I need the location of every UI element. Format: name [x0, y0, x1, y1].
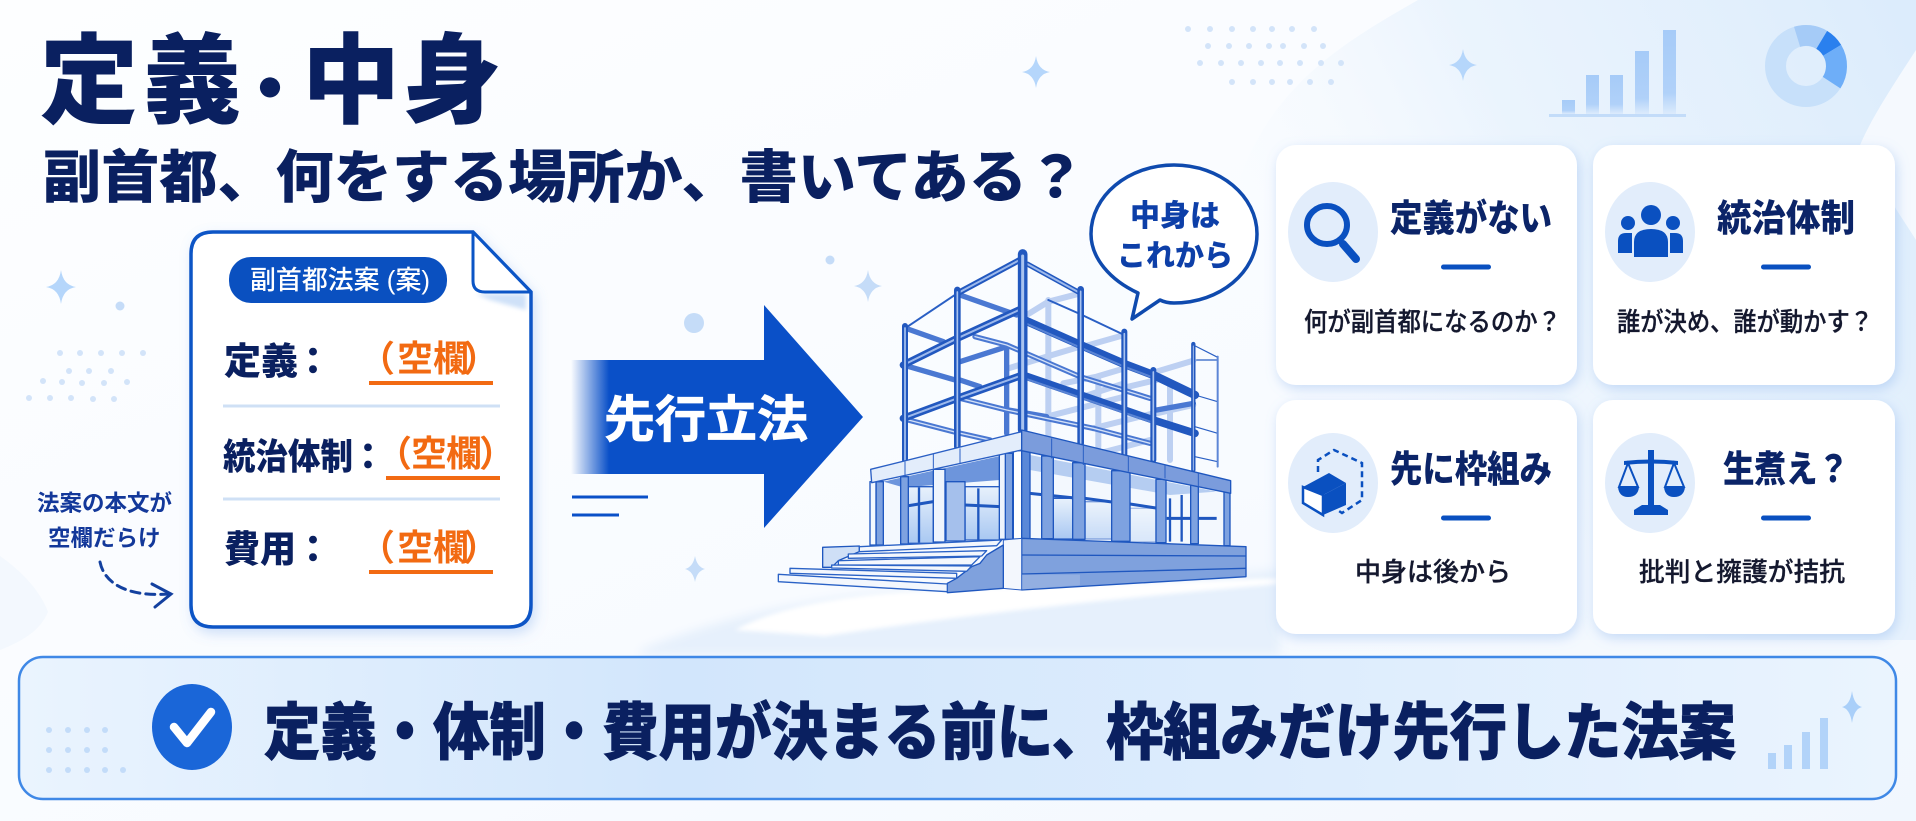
row: cost [224, 527, 499, 574]
banner text [264, 698, 1736, 768]
card text: 何が副首都になるのか？ [1304, 307, 1561, 337]
card heading: 統治体制 [1717, 198, 1855, 239]
icon: donut chart decoration [1764, 24, 1848, 108]
row: governance: （空欄） [376, 433, 515, 474]
building upper frame [903, 254, 1218, 470]
icon: magnifying glass [1288, 182, 1378, 282]
speech bubble [1091, 165, 1257, 319]
subtitle: 副首都、何をする場所か、書いてある？ [43, 146, 1085, 210]
document folded corner [473, 232, 531, 292]
row: definition: （空欄） [359, 338, 499, 379]
building podium and stairs [778, 430, 1246, 593]
speech bubble: 中身は [1130, 200, 1220, 233]
card text: 中身は後から [1355, 557, 1511, 587]
row: cost: （空欄） [359, 527, 499, 568]
arrow: 先行立法: 先行立法 [604, 392, 808, 448]
panel: half-baked [1593, 400, 1895, 634]
title: 定義・中身 [40, 26, 501, 136]
row: definition [224, 338, 499, 385]
row: cost: ： [294, 529, 332, 570]
icon: scales [1605, 433, 1695, 533]
icon: bar chart decoration [1549, 30, 1686, 117]
document tag [229, 257, 447, 303]
icon: cube [1288, 433, 1378, 533]
callout: blanks note: 法案の本文が [37, 490, 173, 516]
banner text: 枠組みだけ先行した法案 [1106, 699, 1736, 768]
arrow: 先行立法 [571, 305, 863, 528]
card heading: 定義がない [1390, 197, 1552, 239]
row: governance: 統治体制 [223, 436, 353, 477]
callout: blanks note: 空欄だらけ [48, 526, 161, 551]
illustration: steel frame building [778, 254, 1246, 593]
row: cost: 費用 [224, 529, 296, 570]
decoration: center stars and dots [684, 256, 882, 582]
row: governance [223, 433, 515, 480]
arrow: dashed pointer to document [100, 562, 171, 607]
card text: 批判と擁護が拮抗 [1639, 557, 1845, 587]
panel: draft bill document [191, 232, 531, 627]
row: governance: ： [350, 436, 386, 477]
panel: no definition [1276, 145, 1577, 385]
panel: governance [1593, 145, 1895, 385]
card heading: 先に枠組み [1390, 449, 1552, 490]
row: definition: 定義 [224, 341, 298, 382]
row: definition: ： [294, 341, 332, 382]
banner decoration [46, 691, 1862, 773]
document tag: 副首都法案 (案) [250, 265, 430, 295]
decoration: left star and dots [26, 270, 146, 402]
banner text: 定義・体制・費用が決まる前に、 [264, 698, 1108, 768]
document sheet [191, 232, 531, 627]
panel: framework first [1276, 400, 1577, 634]
speech bubble: これから [1117, 240, 1233, 273]
icon: check mark [152, 684, 232, 770]
card heading: 生煮え？ [1723, 449, 1849, 490]
card text: 誰が決め、誰が動かす？ [1617, 307, 1873, 337]
panel: conclusion banner [19, 657, 1896, 799]
icon: people [1605, 182, 1695, 282]
callout: blanks note [37, 490, 173, 551]
decoration: top stars and dots [1022, 26, 1477, 88]
